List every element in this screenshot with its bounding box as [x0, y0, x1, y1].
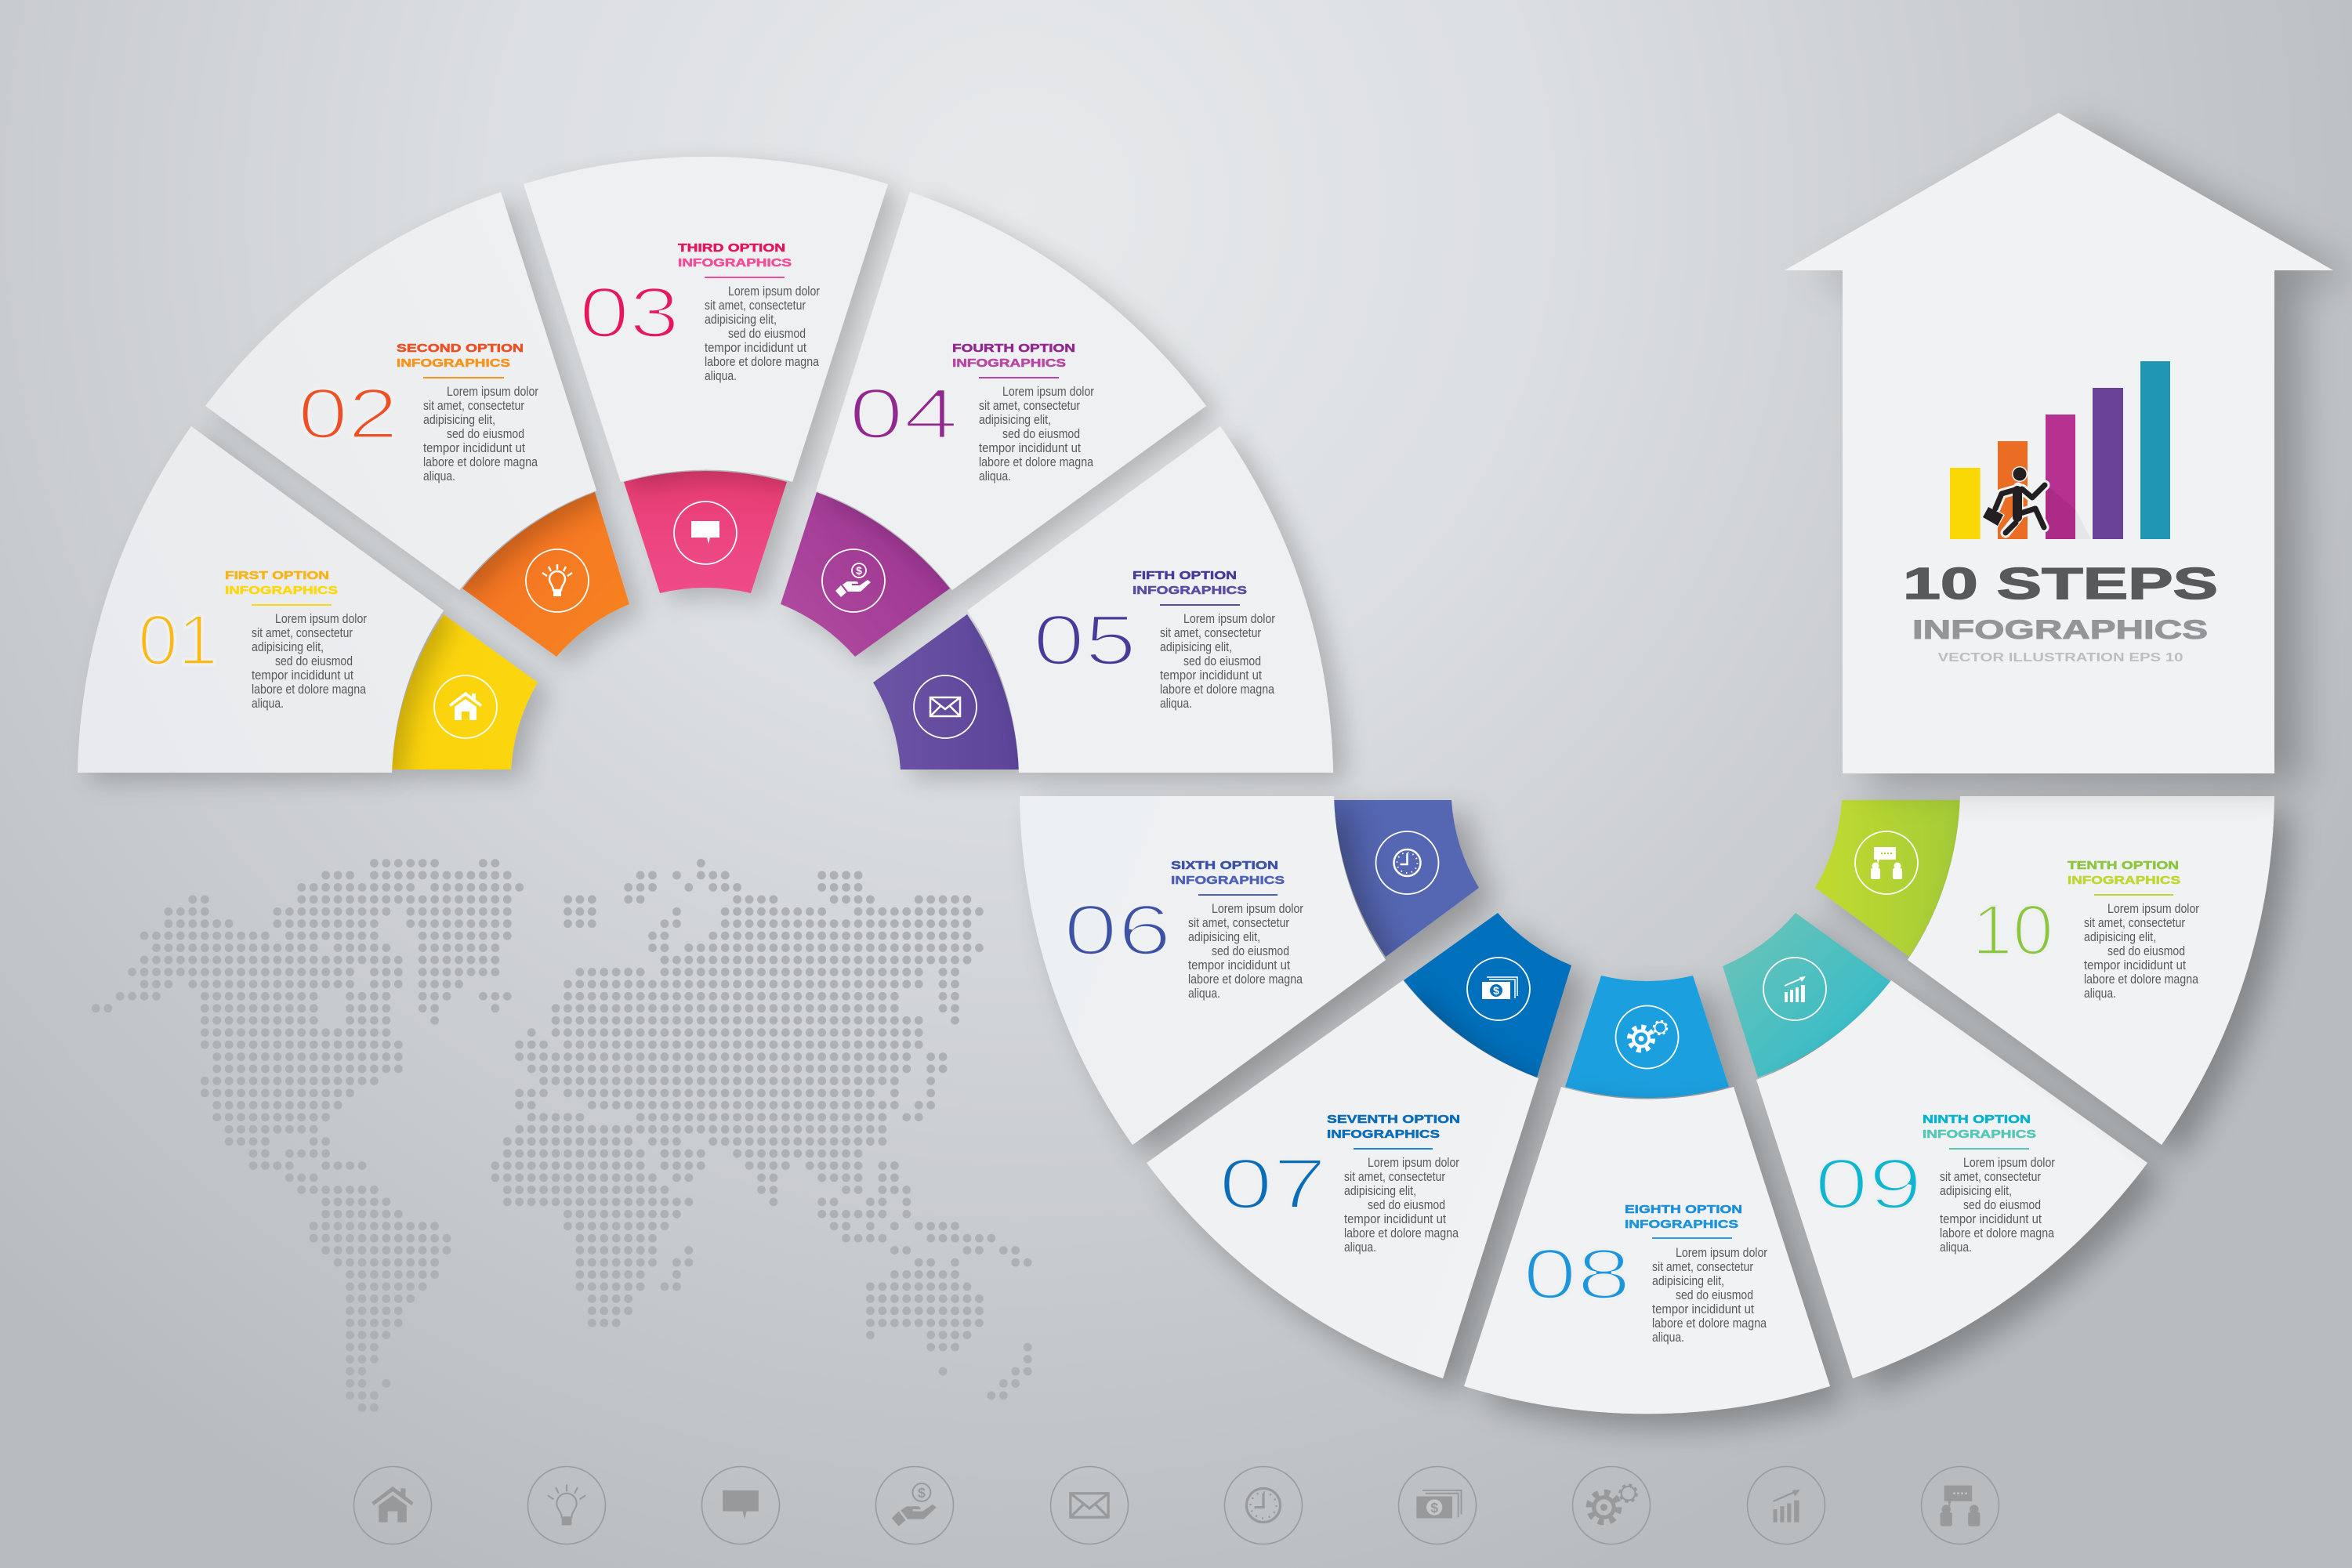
heading 02 — [397, 342, 524, 378]
panel: step 02 — [205, 192, 629, 657]
body text 07: tempor incididunt ut — [1344, 1212, 1446, 1226]
heading 03: INFOGRAPHICS — [678, 256, 792, 270]
body text 02: tempor incididunt ut — [423, 441, 525, 455]
heading 10 — [2068, 859, 2180, 896]
big number 04: 04 — [849, 375, 959, 454]
color band 09 — [1723, 913, 1891, 1077]
big number 09: 09 — [1814, 1145, 1923, 1224]
bottom icon: hand with coin: $ — [918, 1485, 926, 1501]
body text 10: Lorem ipsum dolor — [2107, 902, 2199, 916]
body text 08: labore et dolore magna — [1652, 1316, 1767, 1331]
color band 01 — [392, 614, 538, 770]
body text 04: aliqua. — [979, 469, 1011, 483]
body text 03: tempor incididunt ut — [705, 341, 806, 355]
panel: step 06 — [1020, 796, 1479, 1145]
body text 10: aliqua. — [2084, 987, 2116, 1001]
caption: VECTOR ILLUSTRATION EPS 10 — [1937, 651, 2183, 664]
heading 06 — [1171, 859, 1285, 896]
body text 01: adipisicing elit, — [252, 640, 324, 654]
heading 03 — [678, 241, 792, 278]
white wedge 02 — [205, 192, 596, 590]
panel: step 09 — [1723, 913, 2147, 1378]
icon: speech bubble — [674, 502, 737, 564]
bottom icon row — [354, 1467, 1999, 1544]
heading 04: FOURTH OPTION — [952, 342, 1075, 355]
panel: step 08 — [1464, 976, 1830, 1414]
body text 02: sed do eiusmod — [447, 427, 524, 441]
color band 03 — [624, 471, 787, 593]
body text 09 — [1940, 1156, 2055, 1255]
body text 05: adipisicing elit, — [1160, 640, 1232, 654]
body text 06 — [1188, 902, 1303, 1001]
body text 08: sed do eiusmod — [1676, 1288, 1753, 1302]
icon: running businessman — [1981, 466, 2045, 533]
panel: step 04 — [781, 192, 1206, 657]
body text 08: Lorem ipsum dolor — [1676, 1246, 1767, 1260]
body text 06: sit amet, consectetur — [1188, 916, 1289, 930]
heading 09: INFOGRAPHICS — [1923, 1128, 2036, 1141]
heading 03: THIRD OPTION — [678, 241, 785, 255]
heading 02: SECOND OPTION — [397, 342, 524, 355]
body text 02: sit amet, consectetur — [423, 399, 524, 413]
panel: step 10 — [1815, 796, 2274, 1145]
body text 08: aliqua. — [1652, 1331, 1684, 1345]
body text 10: adipisicing elit, — [2084, 930, 2156, 944]
body text 07: aliqua. — [1344, 1240, 1376, 1255]
body text 05: Lorem ipsum dolor — [1183, 612, 1275, 626]
body text 09: tempor incididunt ut — [1940, 1212, 2042, 1226]
body text 09: labore et dolore magna — [1940, 1226, 2055, 1240]
body text 07: labore et dolore magna — [1344, 1226, 1459, 1240]
body text 08: tempor incididunt ut — [1652, 1302, 1754, 1316]
body text 08 — [1652, 1246, 1767, 1345]
body text 10: tempor incididunt ut — [2084, 958, 2186, 972]
body text 05: aliqua. — [1160, 697, 1192, 711]
body text 06: labore et dolore magna — [1188, 972, 1303, 987]
heading 08: INFOGRAPHICS — [1625, 1218, 1738, 1231]
body text 06: sed do eiusmod — [1212, 944, 1289, 958]
heading 08: EIGHTH OPTION — [1625, 1203, 1742, 1216]
panel: step 07 — [1147, 913, 1571, 1378]
bottom icon: hand with coin — [876, 1467, 953, 1544]
color band 04 — [781, 492, 950, 657]
arrow shape — [1785, 113, 2333, 773]
body text 05: sed do eiusmod — [1183, 654, 1261, 668]
panel: up arrow title card — [1785, 113, 2333, 773]
bottom icon: envelope — [1050, 1467, 1129, 1544]
body text 01: sed do eiusmod — [275, 654, 353, 668]
icon: envelope — [914, 675, 977, 738]
white wedge 03 — [524, 157, 888, 482]
panel: step 05 — [873, 426, 1333, 773]
body text 04: sit amet, consectetur — [979, 399, 1080, 413]
bottom icon: two people talking — [1922, 1467, 1999, 1544]
body text 07: sed do eiusmod — [1368, 1198, 1445, 1212]
heading 08 — [1625, 1203, 1742, 1239]
body text 04: sed do eiusmod — [1002, 427, 1080, 441]
title: 10 STEPS — [1903, 559, 2218, 609]
bottom icon: banknotes: $ — [1430, 1500, 1438, 1515]
heading 10: INFOGRAPHICS — [2068, 874, 2180, 887]
body text 01: tempor incididunt ut — [252, 668, 353, 683]
body text 09: Lorem ipsum dolor — [1963, 1156, 2055, 1170]
body text 02: labore et dolore magna — [423, 455, 538, 469]
body text 03: Lorem ipsum dolor — [728, 284, 820, 299]
body text 04: adipisicing elit, — [979, 413, 1051, 427]
body text 07 — [1344, 1156, 1459, 1255]
body text 10: labore et dolore magna — [2084, 972, 2199, 987]
icon: clock — [1376, 831, 1439, 894]
white wedge 10 — [1908, 796, 2274, 1145]
panel: step 03 — [524, 157, 888, 593]
bottom icon: banknotes — [1398, 1467, 1477, 1544]
body text 06: aliqua. — [1188, 987, 1220, 1001]
body text 07: Lorem ipsum dolor — [1368, 1156, 1459, 1170]
heading 01: INFOGRAPHICS — [225, 584, 338, 597]
body text 04: labore et dolore magna — [979, 455, 1094, 469]
big number 01: 01 — [138, 601, 218, 680]
body text 09: adipisicing elit, — [1940, 1184, 2012, 1198]
body text 01 — [252, 612, 367, 711]
body text 06: Lorem ipsum dolor — [1212, 902, 1303, 916]
body text 05: sit amet, consectetur — [1160, 626, 1261, 640]
bottom icon: bulb — [528, 1467, 605, 1544]
heading 05 — [1133, 569, 1247, 606]
body text 03: labore et dolore magna — [705, 355, 820, 369]
body text 07: adipisicing elit, — [1344, 1184, 1416, 1198]
bottom icon: clock — [1224, 1467, 1303, 1544]
white wedge 01 — [78, 426, 444, 773]
body text 06: adipisicing elit, — [1188, 930, 1260, 944]
icon: home — [434, 675, 497, 738]
color band 06 — [1334, 800, 1479, 957]
body text 01: sit amet, consectetur — [252, 626, 353, 640]
body text 01: labore et dolore magna — [252, 683, 367, 697]
world dot map — [96, 864, 1027, 1407]
big number 07: 07 — [1219, 1145, 1327, 1224]
icon: two people talking — [1855, 831, 1918, 894]
color band 10 — [1815, 800, 1960, 957]
body text 05: tempor incididunt ut — [1160, 668, 1262, 683]
heading 05: FIFTH OPTION — [1133, 569, 1237, 582]
body text 04: tempor incididunt ut — [979, 441, 1081, 455]
body text 10 — [2084, 902, 2199, 1001]
big number 05: 05 — [1033, 601, 1136, 680]
heading 07 — [1327, 1113, 1460, 1150]
big number 06: 06 — [1064, 891, 1172, 970]
heading 07: SEVENTH OPTION — [1327, 1113, 1460, 1126]
color band 02 — [462, 492, 629, 657]
body text 04 — [979, 385, 1094, 483]
color band 05 — [873, 614, 1019, 770]
heading 10: TENTH OPTION — [2068, 859, 2179, 872]
color band 08 — [1565, 976, 1729, 1098]
icon: hand with coin: $ — [856, 564, 862, 577]
body text 09: sed do eiusmod — [1963, 1198, 2041, 1212]
body text 01: Lorem ipsum dolor — [275, 612, 367, 626]
body text 03: aliqua. — [705, 369, 737, 383]
white wedge 05 — [967, 426, 1333, 773]
body text 02: adipisicing elit, — [423, 413, 495, 427]
big number 02: 02 — [298, 375, 398, 454]
big number 08: 08 — [1523, 1235, 1631, 1314]
icon: rising bar chart — [1763, 958, 1826, 1020]
subtitle: INFOGRAPHICS — [1912, 615, 2208, 645]
heading 04 — [952, 342, 1075, 378]
heading 01: FIRST OPTION — [225, 569, 329, 582]
icon: banknotes — [1467, 958, 1530, 1020]
white wedge 09 — [1756, 980, 2147, 1378]
body text 04: Lorem ipsum dolor — [1002, 385, 1094, 399]
panel: step 01 — [78, 426, 538, 773]
icon: light bulb — [526, 549, 589, 612]
heading 04: INFOGRAPHICS — [952, 357, 1066, 370]
body text 02 — [423, 385, 538, 483]
body text 09: sit amet, consectetur — [1940, 1170, 2041, 1184]
white wedge 06 — [1020, 796, 1386, 1145]
heading 07: INFOGRAPHICS — [1327, 1128, 1440, 1141]
body text 01: aliqua. — [252, 697, 284, 711]
icon: gears — [1616, 1006, 1679, 1069]
white wedge 08 — [1464, 1087, 1830, 1414]
body text 09: aliqua. — [1940, 1240, 1972, 1255]
bar chart — [1950, 361, 2170, 539]
heading 06: INFOGRAPHICS — [1171, 874, 1285, 887]
body text 07: sit amet, consectetur — [1344, 1170, 1445, 1184]
heading 02: INFOGRAPHICS — [397, 357, 510, 370]
body text 08: adipisicing elit, — [1652, 1274, 1724, 1288]
bottom icon: gears — [1572, 1467, 1651, 1544]
bottom icon: rising bar chart — [1748, 1467, 1825, 1544]
big number 03: 03 — [579, 273, 680, 353]
icon: hand with coin — [822, 549, 885, 612]
body text 03 — [705, 284, 820, 383]
bottom icon: speech bubble — [702, 1467, 779, 1544]
big number 10: 10 — [1972, 891, 2053, 970]
heading 01 — [225, 569, 338, 606]
white wedge 04 — [816, 192, 1206, 590]
icon: banknotes: $ — [1493, 984, 1499, 997]
white wedge 07 — [1147, 980, 1538, 1378]
body text 06: tempor incididunt ut — [1188, 958, 1290, 972]
body text 05: labore et dolore magna — [1160, 683, 1275, 697]
heading 06: SIXTH OPTION — [1171, 859, 1278, 872]
body text 03: sed do eiusmod — [728, 327, 806, 341]
body text 03: adipisicing elit, — [705, 313, 777, 327]
heading 09: NINTH OPTION — [1923, 1113, 2031, 1126]
body text 02: aliqua. — [423, 469, 455, 483]
body text 10: sit amet, consectetur — [2084, 916, 2185, 930]
body text 02: Lorem ipsum dolor — [447, 385, 538, 399]
heading 05: INFOGRAPHICS — [1133, 584, 1247, 597]
bottom icon: home — [354, 1467, 431, 1544]
body text 03: sit amet, consectetur — [705, 299, 806, 313]
body text 05 — [1160, 612, 1275, 711]
body text 08: sit amet, consectetur — [1652, 1260, 1753, 1274]
color band 07 — [1404, 913, 1571, 1077]
body text 10: sed do eiusmod — [2107, 944, 2185, 958]
heading 09 — [1923, 1113, 2036, 1150]
